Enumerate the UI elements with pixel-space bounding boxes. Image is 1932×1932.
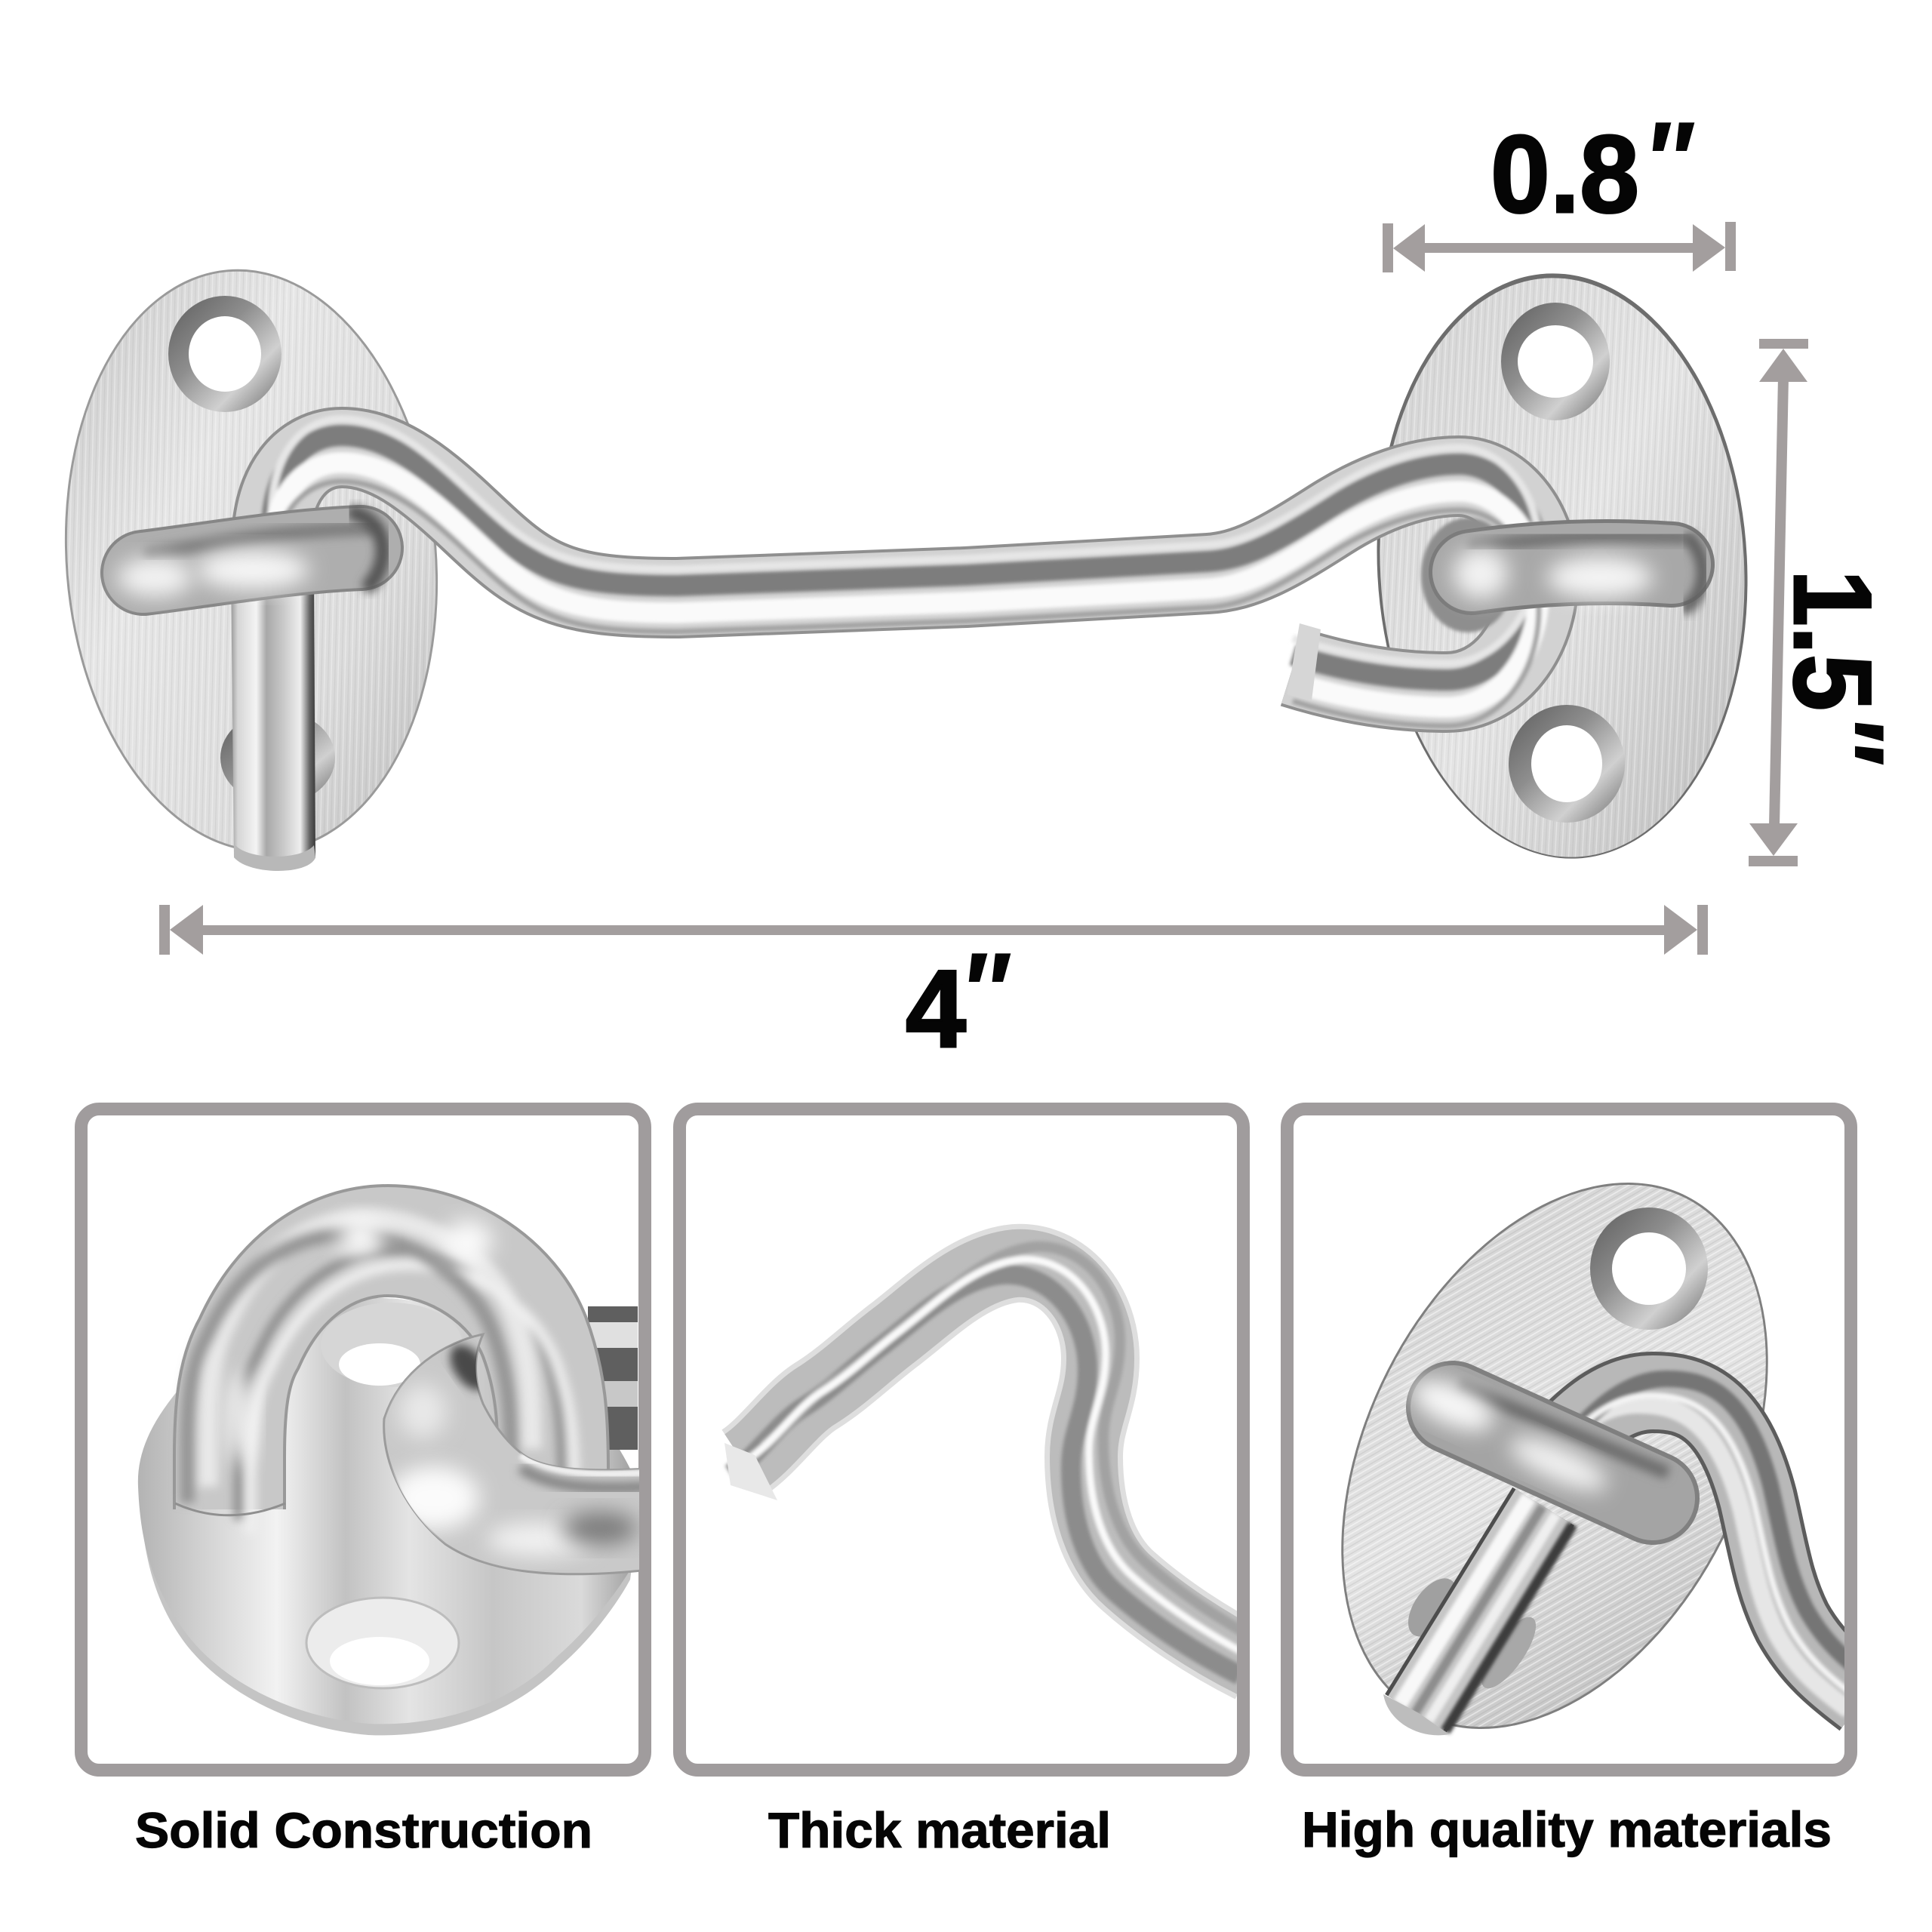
- dimension arrow: 0.8 inch width: [1383, 222, 1736, 272]
- main product: hook and eye latch: [43, 255, 1762, 871]
- panel frame: [82, 1109, 645, 1770]
- right staple eye: [1421, 518, 1703, 632]
- caption: high quality materials: High quality materials: [1302, 1801, 1832, 1857]
- dimension label: 0.8 inch: [1491, 100, 1694, 235]
- dimension label: 1.5 inch: ″: [1785, 714, 1906, 764]
- dimension label: 0.8 inch: ″: [1644, 100, 1694, 221]
- wire cut tip: [724, 1443, 777, 1500]
- dimension label: 1.5 inch: 1.5: [1771, 570, 1894, 711]
- left staple eye: [117, 513, 383, 597]
- panel: solid construction: [82, 1109, 649, 1858]
- hook loop through the staple: [384, 1334, 649, 1574]
- right mounting plate: [1362, 264, 1762, 868]
- dimension arrow: 4 inch length: [159, 905, 1708, 955]
- close-up of plate, pin, staple and hook: [1341, 1183, 1844, 1736]
- dimension arrow: 1.5 inch height: [1749, 339, 1808, 866]
- left mounting plate: [43, 255, 460, 866]
- panel frame: [679, 1109, 1244, 1770]
- dimension label: 4 inch: [906, 931, 1011, 1070]
- hook wire: [272, 419, 1539, 726]
- panel frame: [1287, 1109, 1850, 1770]
- hook pin end on the left plate: [231, 574, 315, 871]
- panel: high quality materials: [1255, 1109, 1878, 1857]
- close-up of bent wire: [731, 1247, 1272, 1675]
- hook cut tip on the right: [1287, 623, 1321, 700]
- dimension label: 0.8 inch: 0.8: [1491, 112, 1639, 235]
- caption: solid construction: Solid Construction: [135, 1802, 592, 1858]
- dimension label: 4 inch: ″: [960, 931, 1011, 1052]
- caption: thick material: Thick material: [768, 1802, 1111, 1858]
- close-up of staple and plate: [138, 1218, 649, 1735]
- dimension label: 4 inch: 4: [906, 947, 966, 1070]
- panel: thick material: [679, 1109, 1272, 1858]
